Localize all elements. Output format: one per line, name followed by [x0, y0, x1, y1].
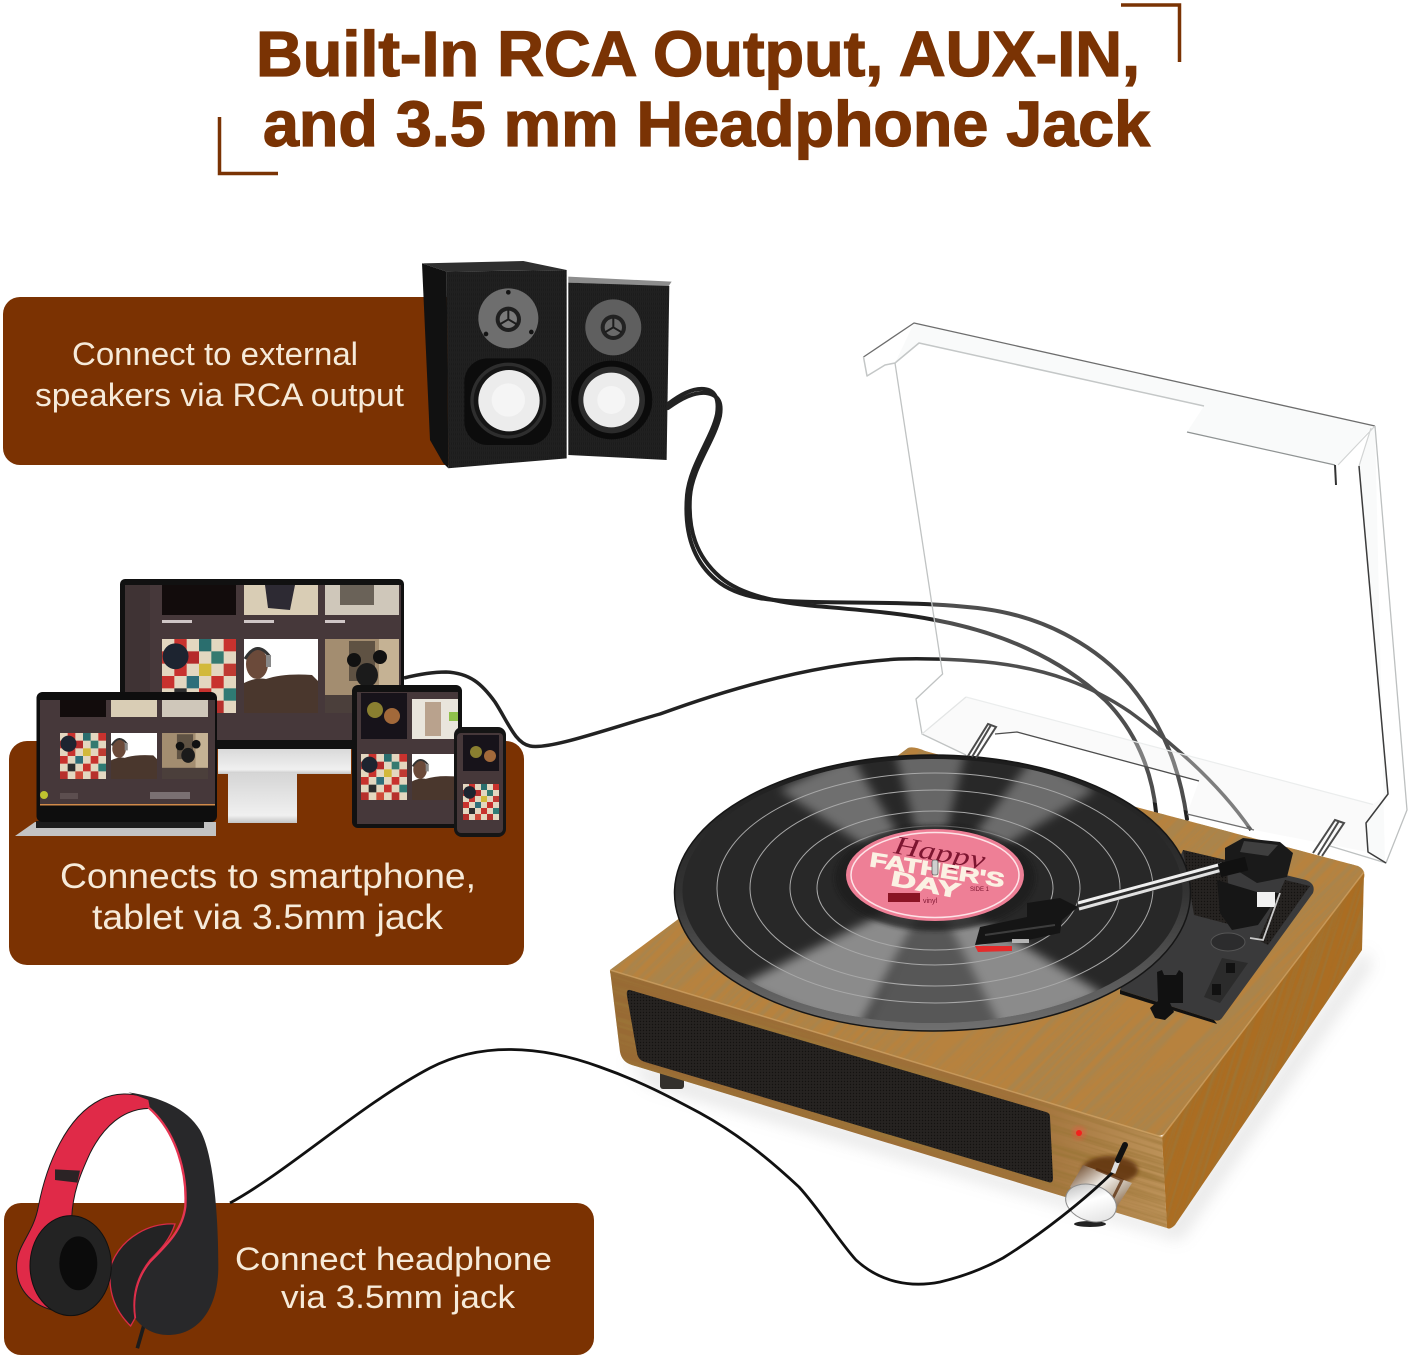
panel text: headphones: via 3.5mm jack [281, 1279, 516, 1315]
panel text: speakers [35, 336, 404, 413]
record label: FATHER'S [868, 849, 1006, 892]
desktop monitor [120, 579, 404, 823]
soft shadow [625, 950, 1372, 1240]
pivot [1217, 880, 1280, 930]
wooden front [610, 970, 1167, 1228]
panel text: smartphone: tablet via 3.5mm jack [92, 898, 444, 937]
laptop [15, 692, 217, 836]
panel text: speakers: Connect to external [72, 336, 358, 372]
red cartridge [975, 946, 1012, 952]
turntable [610, 722, 1372, 1240]
wooden top surface [610, 747, 1364, 1136]
counterweight [1225, 838, 1293, 883]
panel text: smartphone: Connects to smartphone, [60, 857, 476, 896]
hinge left [968, 724, 996, 758]
vinyl record [674, 745, 1190, 1035]
record label: SIDE 1 [970, 887, 990, 893]
record label: vinyl [923, 898, 937, 905]
title [256, 18, 1150, 160]
devices [15, 579, 506, 837]
title corner bracket: bottom left [220, 117, 278, 174]
left ear pad [30, 1216, 111, 1316]
panel: external speakers [3, 297, 473, 465]
panel text: headphones: Connect headphone [235, 1241, 552, 1277]
headshell [975, 898, 1078, 945]
panel: headphones [4, 1203, 594, 1355]
wooden right side [1162, 872, 1364, 1229]
arm rest and switches [1150, 958, 1248, 1020]
cable: headphone jack [230, 1049, 1125, 1284]
left speaker [422, 261, 567, 468]
title: and 3.5 mm Headphone Jack [263, 88, 1150, 160]
record label: Happy [891, 830, 988, 875]
record label [846, 829, 1024, 921]
tablet [352, 685, 462, 828]
headphones [17, 1092, 218, 1348]
title corner bracket: top right [1121, 5, 1180, 62]
red headband [17, 1094, 150, 1311]
right ear plate [110, 1224, 175, 1326]
power LED [1072, 1126, 1086, 1140]
transparent dust cover [864, 323, 1407, 863]
record label: DAY [889, 867, 962, 903]
cable: RCA to speakers [668, 389, 1187, 819]
headphone cord [137, 1325, 144, 1348]
smartphone [454, 727, 506, 837]
tonearm base plate [1120, 850, 1314, 1024]
volume knob [1061, 1156, 1138, 1228]
cable: 3.5mm to devices [404, 659, 1251, 830]
panel text: speakers: speakers via RCA output [35, 377, 404, 413]
right speaker [568, 277, 672, 460]
speaker grille [627, 990, 1053, 1182]
panel: smartphone and tablet [9, 741, 524, 965]
panel text: headphones [235, 1241, 552, 1315]
tonearm [975, 838, 1293, 952]
panel text: smartphone [60, 857, 476, 937]
speakers [422, 261, 672, 468]
black right band and cup [128, 1092, 218, 1335]
title: Built-In RCA Output, AUX-IN, [256, 18, 1140, 90]
hinge right [1313, 820, 1344, 856]
foot [660, 1070, 684, 1089]
